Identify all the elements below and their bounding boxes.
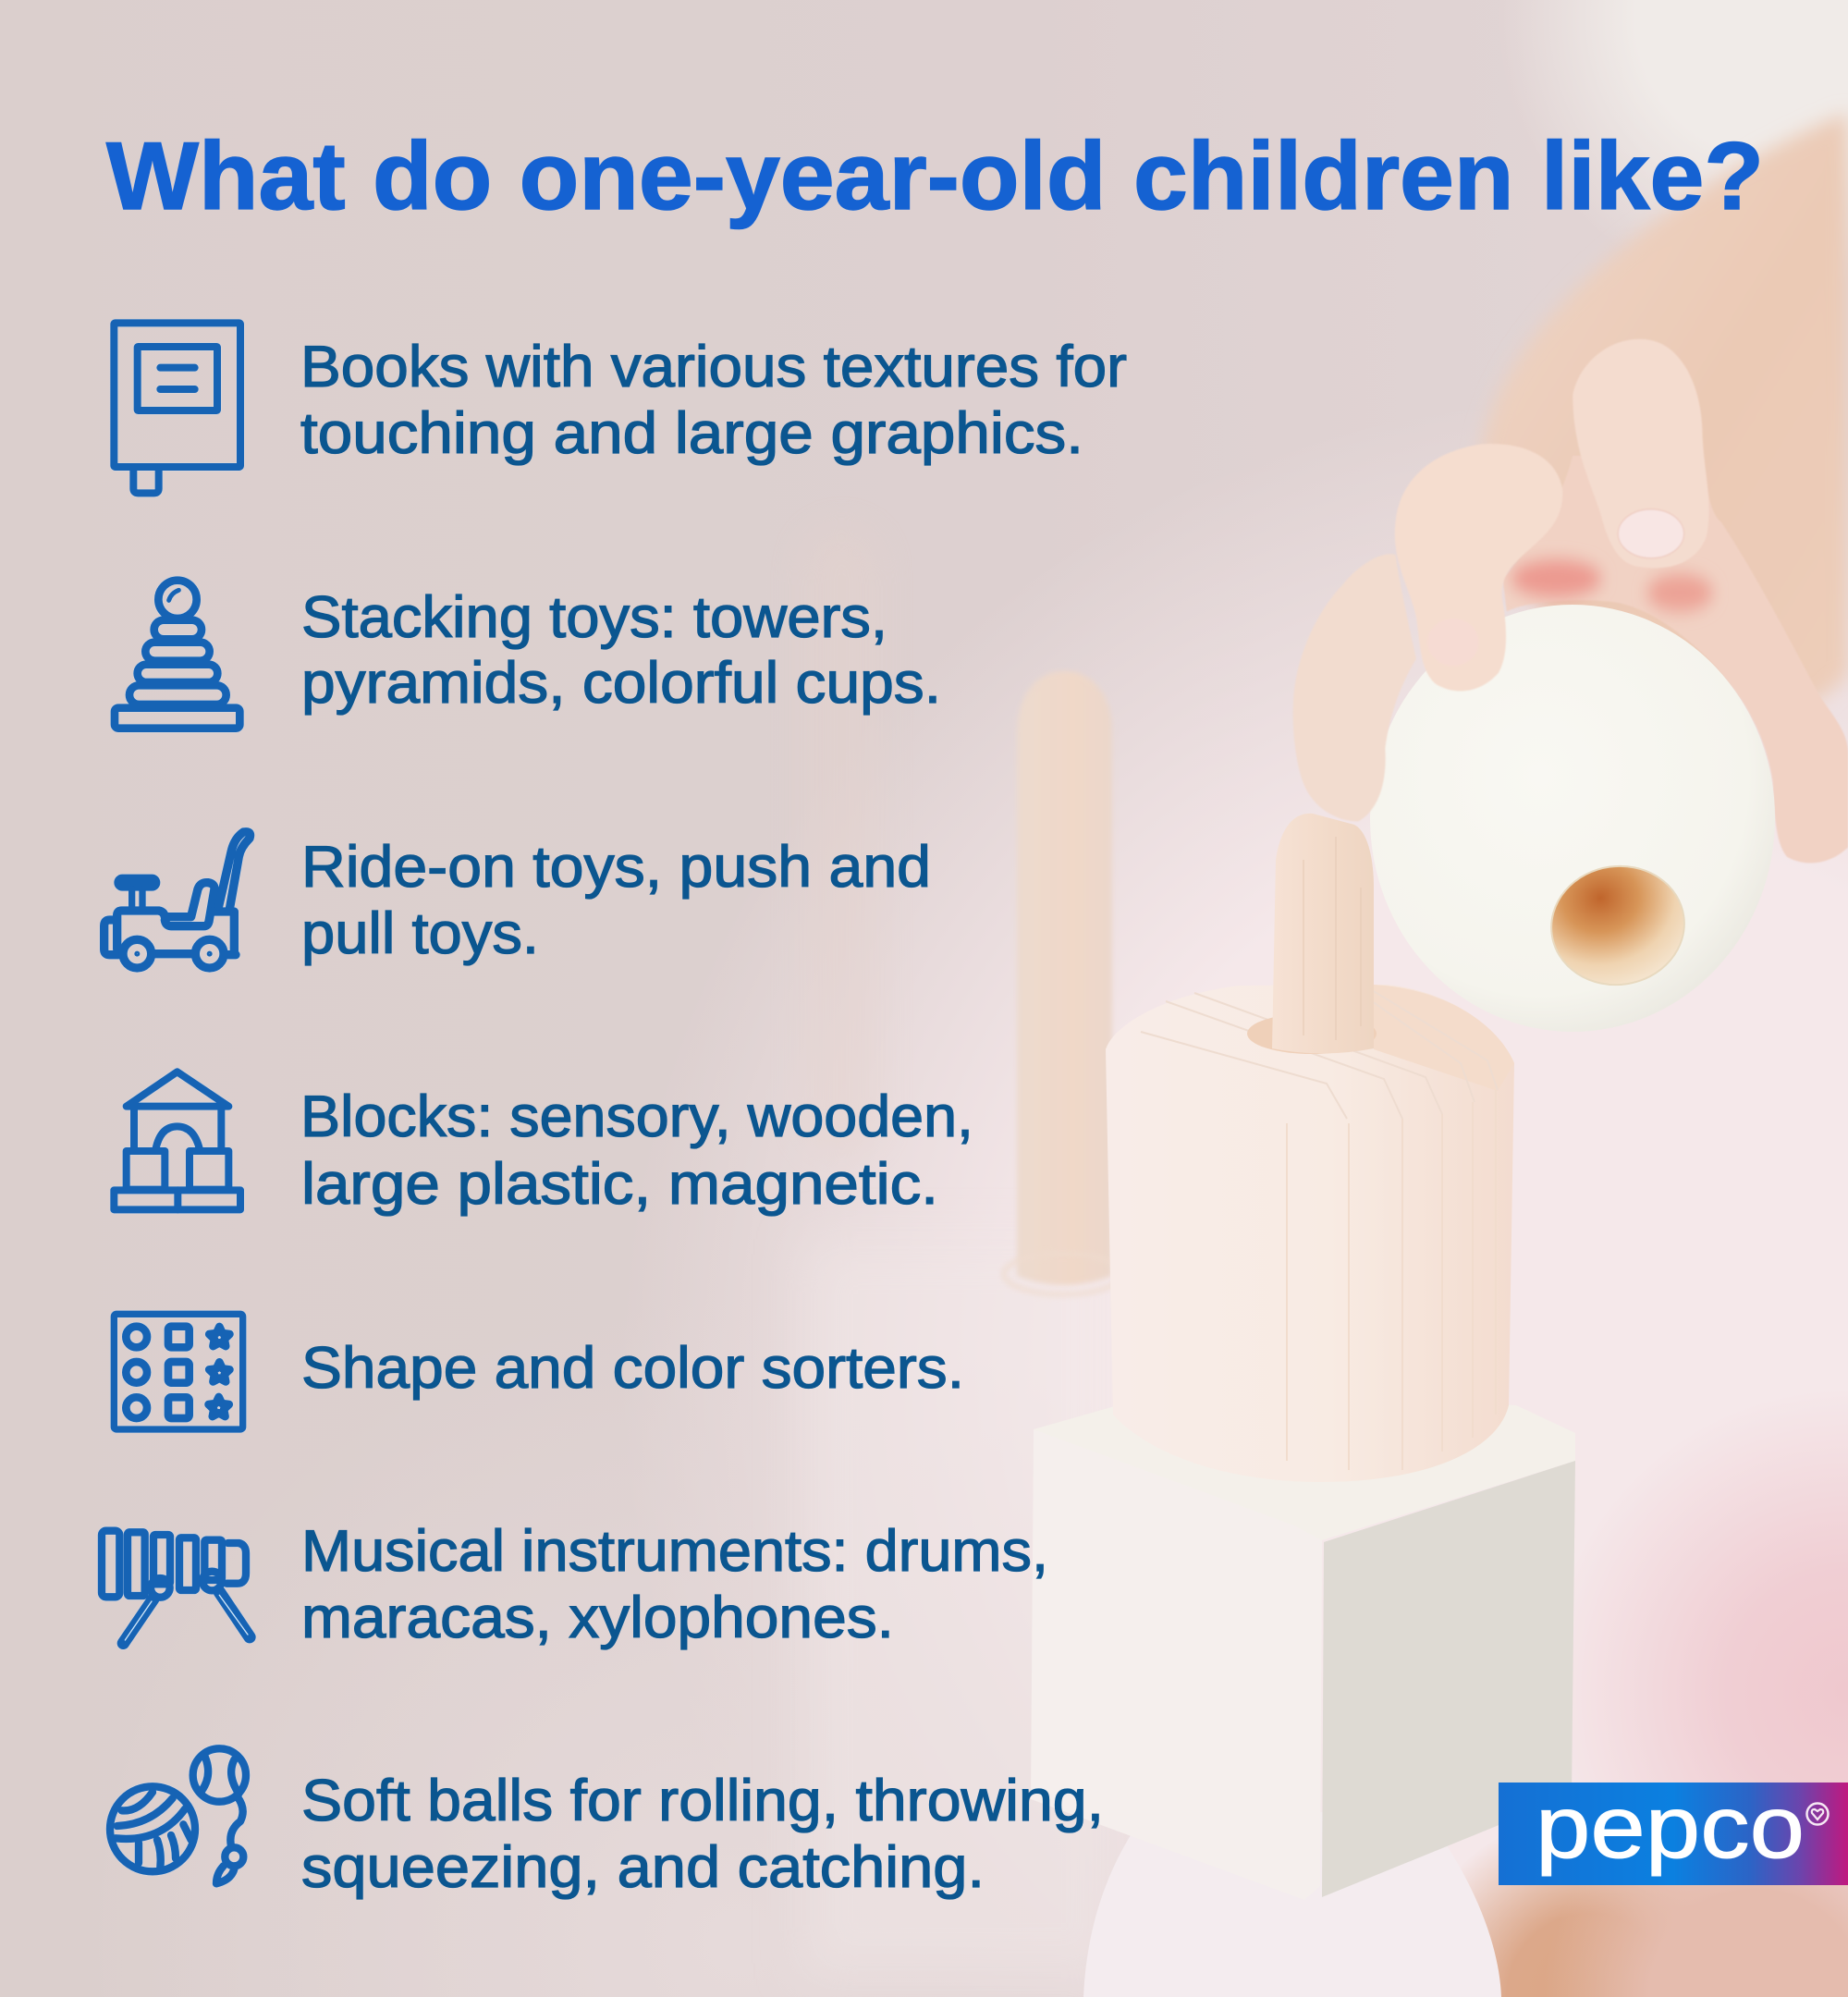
arm <box>1479 113 1848 703</box>
text: stacking toys <box>301 585 941 716</box>
title: What do one-year-old children like? <box>106 123 1764 230</box>
text: ride-on toys: Ride-on toys, push and <box>301 835 931 900</box>
text: soft balls: squeezing, and catching. <box>301 1835 985 1900</box>
text: shape sorters: Shape and color sorters. <box>301 1336 964 1401</box>
text: books <box>300 335 1127 466</box>
white cube block <box>1031 1387 1575 1900</box>
text: soft balls: Soft balls for rolling, throwing, <box>301 1769 1104 1833</box>
text: books: touching and large graphics. <box>300 401 1083 466</box>
icon: soft balls <box>110 1748 246 1883</box>
icon: book <box>114 323 240 493</box>
hand: palm <box>1502 456 1848 863</box>
text: ride-on toys <box>301 835 931 966</box>
icon: xylophone <box>102 1531 250 1643</box>
text: stacking toys: Stacking toys: towers, <box>301 585 887 650</box>
text: stacking toys: pyramids, colorful cups. <box>301 651 941 716</box>
text: ride-on toys: pull toys. <box>301 901 539 966</box>
background: blurred wooden toy behind <box>802 527 1117 1979</box>
wooden cylinder <box>1106 985 1514 1482</box>
text: musical instruments <box>301 1519 1048 1650</box>
icon: shape sorter <box>114 1314 243 1429</box>
text: soft balls <box>301 1769 1104 1900</box>
bottom round toy <box>1083 1812 1501 1997</box>
text: blocks: large plastic, magnetic. <box>301 1152 938 1217</box>
icon: stacking pyramid <box>115 581 239 729</box>
hand: fingers <box>1293 339 1709 821</box>
icon: ride-on toy <box>104 832 251 968</box>
text: books: Books with various textures for <box>300 335 1127 399</box>
front wooden peg <box>1272 814 1374 1054</box>
wooden ball held by the hand <box>1370 605 1775 1032</box>
back peg <box>1004 671 1122 1294</box>
text: musical instruments: Musical instruments: drums, <box>301 1519 1048 1584</box>
icon: blocks house <box>114 1072 240 1209</box>
text: blocks <box>300 1084 973 1217</box>
text: musical instruments: maracas, xylophones. <box>301 1586 894 1650</box>
logo: pepco: pepco <box>1536 1778 1805 1877</box>
text: blocks: Blocks: sensory, wooden, <box>300 1084 973 1149</box>
logo: pepco <box>1499 1778 1848 1885</box>
